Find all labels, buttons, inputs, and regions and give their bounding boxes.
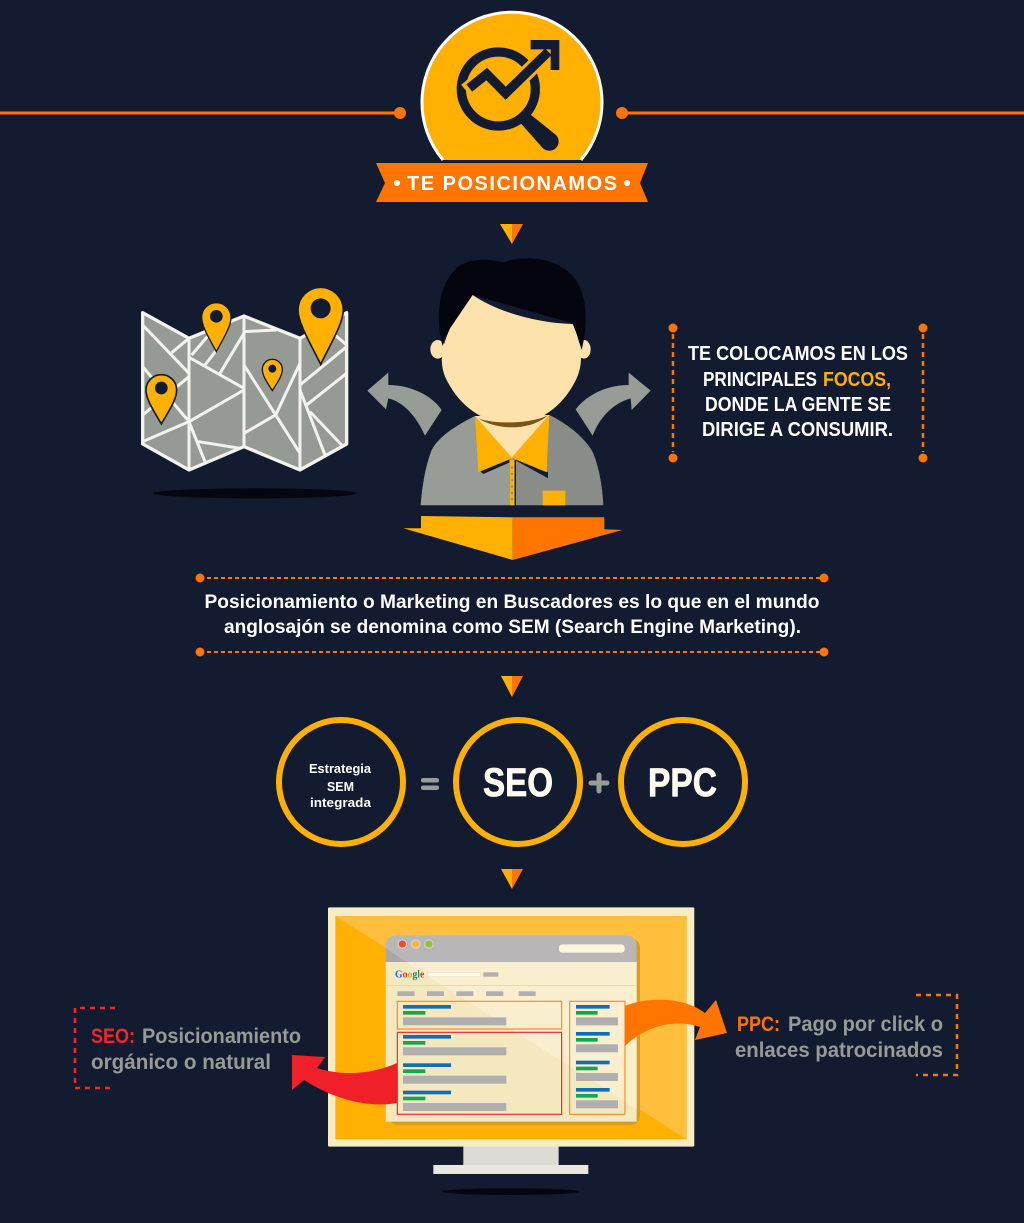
header connector: right line: [616, 107, 1024, 119]
illustration: faceless person: [421, 258, 603, 505]
circle: estrategia SEM integrada: SEM: [327, 779, 354, 794]
label: SEO: orgánico o natural: [91, 1051, 271, 1074]
text block: SEM definition: Posicionamiento o Marketing en Buscadores es lo que en el mundo: [204, 591, 820, 613]
arrow: down 1: [500, 224, 523, 244]
label: SEO: Posicionamiento: [142, 1025, 301, 1048]
monitor with search results page: [328, 907, 694, 1195]
text block: SEM definition: [196, 574, 828, 656]
icon: folded map with pins: [143, 287, 357, 498]
arrow: curved left towards map: [367, 373, 442, 436]
arrow: red, SEO results to label: [292, 1055, 397, 1104]
label: SEO: [75, 1008, 301, 1088]
callout: focos text: TE COLOCAMOS EN LOS: [688, 343, 908, 365]
circle: estrategia SEM integrada: [279, 720, 403, 844]
callout: focos text: PRINCIPALES: [703, 369, 817, 391]
label: PPC: [735, 995, 957, 1075]
circle: estrategia SEM integrada: Estrategia: [309, 761, 372, 776]
callout: focos text: [668, 324, 928, 462]
circle: PPC: [621, 720, 745, 844]
title ribbon: [376, 163, 648, 202]
text block: SEM definition: anglosajón se denomina como SEM (Search Engine Marketing).: [224, 616, 801, 638]
arrow: orange, PPC results to label: [625, 1000, 727, 1046]
circle: PPC: PPC: [648, 761, 717, 805]
title ribbon: TE POSICIONAMOS: [407, 173, 617, 195]
plus sign: [591, 775, 607, 791]
header connector: left line: [0, 107, 406, 119]
label: SEO: SEO:: [91, 1025, 135, 1048]
header badge: magnifier with growth arrow: [422, 12, 602, 160]
label: PPC: PPC:: [737, 1013, 780, 1036]
callout: focos text: FOCOS,: [823, 369, 891, 391]
arrow: curved right towards text: [576, 373, 651, 436]
arrow: down 2: [501, 676, 523, 697]
callout: focos text: DIRIGE A CONSUMIR.: [702, 419, 893, 441]
circle: SEO: SEO: [483, 761, 553, 805]
circle: SEO: [456, 720, 580, 844]
equals sign: [421, 778, 439, 790]
arrow: down 3: [501, 869, 523, 889]
callout: focos text: DONDE LA GENTE SE: [705, 394, 891, 416]
label: PPC: Pago por click o: [788, 1013, 943, 1036]
circle: estrategia SEM integrada: integrada: [310, 795, 372, 810]
label: PPC: enlaces patrocinados: [735, 1039, 943, 1062]
arrow: large down base under person: [403, 516, 622, 560]
monitor with search results page: Google: [395, 970, 425, 981]
